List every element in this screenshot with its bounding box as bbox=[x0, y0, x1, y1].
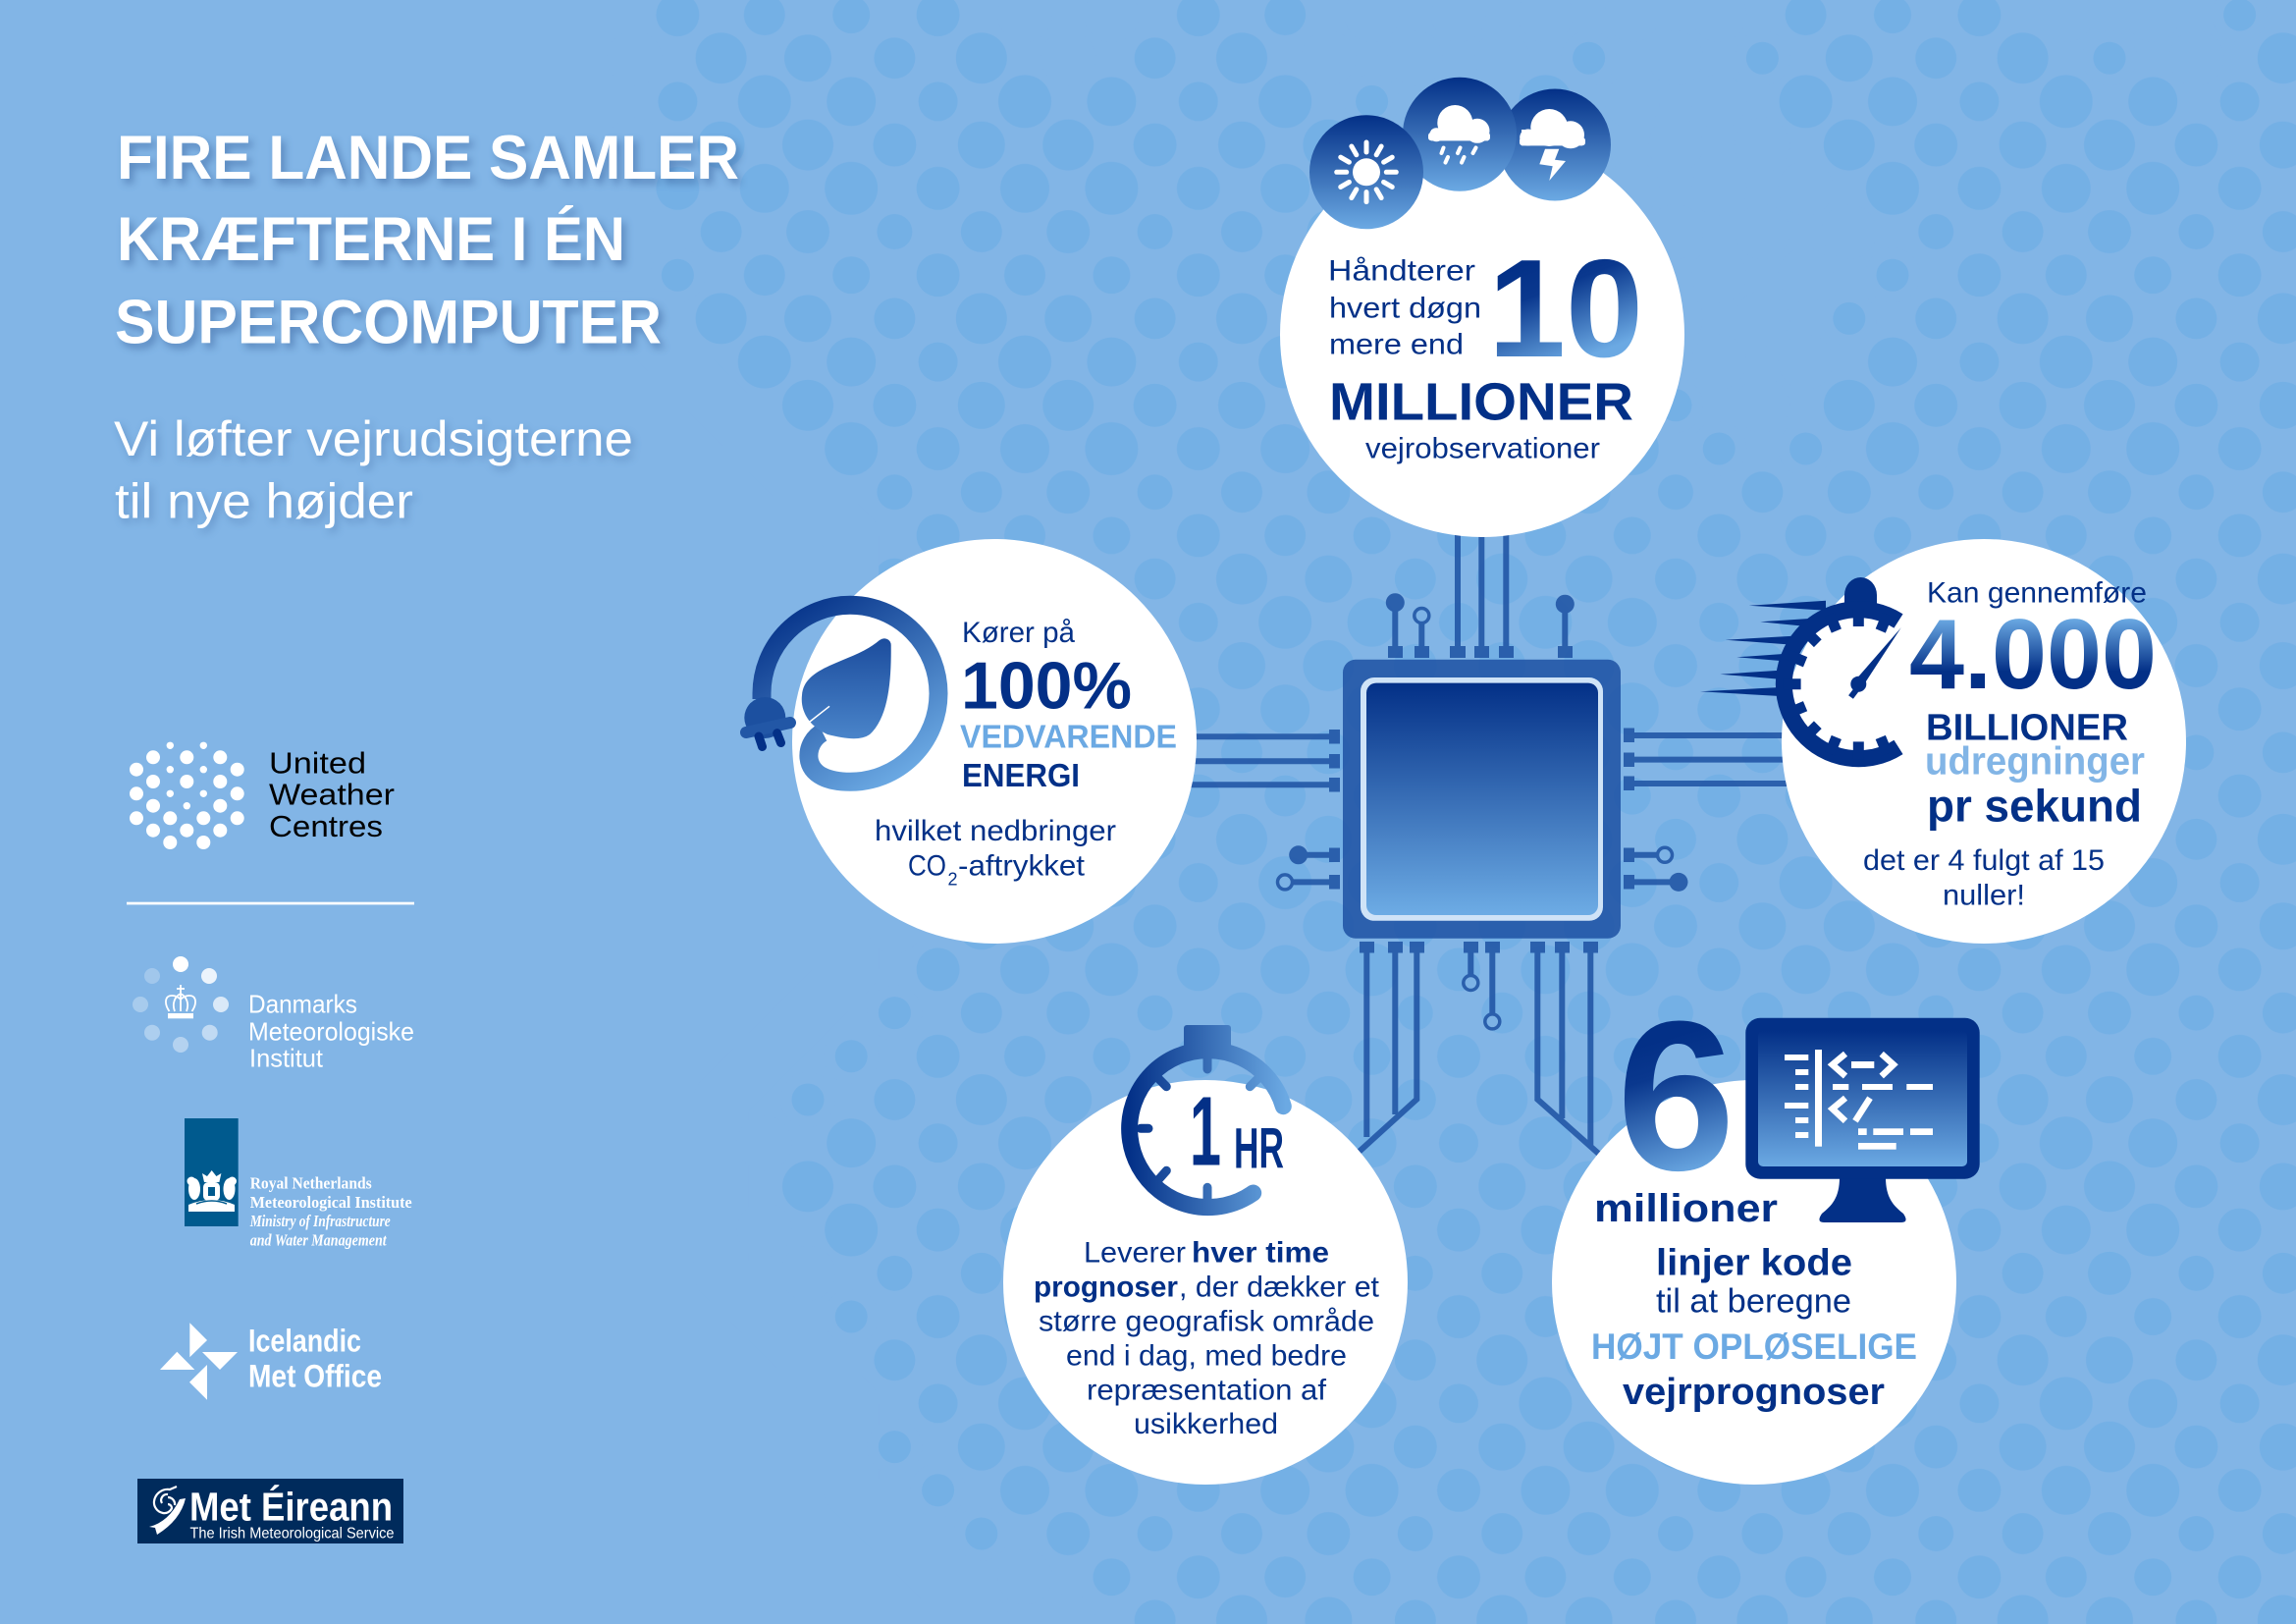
text: description: prognoser bbox=[1034, 1272, 1178, 1304]
text: description: repræsentation af bbox=[1087, 1375, 1327, 1407]
stat: 6: 6 bbox=[1617, 977, 1735, 1215]
logo text: Danmarks bbox=[248, 990, 357, 1019]
text: description: hver time bbox=[1192, 1237, 1329, 1270]
panel: 10 million observations bbox=[1280, 78, 1684, 537]
text: det er 4 fulgt af 15 nuller: det er 4 fulgt af 15 bbox=[1863, 844, 2105, 877]
stat: 1 HR: 1 bbox=[1190, 1077, 1221, 1187]
text: vejrobservationer: vejrobservationer bbox=[1365, 433, 1600, 465]
text: CO2-aftrykket: CO bbox=[908, 850, 946, 883]
subtitle: Vi løfter vejrudsigterne bbox=[114, 411, 633, 466]
text: hvilket nedbringer: hvilket nedbringer bbox=[875, 815, 1116, 847]
stat label: MILLIONER: MILLIONER bbox=[1329, 373, 1633, 432]
logo text: Icelandic bbox=[248, 1324, 361, 1359]
logo text: Met Éireann bbox=[189, 1484, 393, 1529]
stat label: BILLIONER: BILLIONER bbox=[1926, 707, 2128, 748]
title: KRÆFTERNE I ÉN bbox=[117, 205, 625, 274]
chip with circuit pins bbox=[825, 491, 1796, 1157]
logo text: Meteorologiske bbox=[248, 1016, 414, 1046]
stat: 4.000: 4.000 bbox=[1909, 600, 2157, 710]
text: til at beregne: til at beregne bbox=[1656, 1283, 1851, 1321]
icon: DMI crown with dot ring bbox=[133, 956, 229, 1053]
text: description: Leverer bbox=[1084, 1237, 1186, 1270]
title: SUPERCOMPUTER bbox=[115, 289, 662, 357]
logo: United Weather Centres bbox=[130, 742, 395, 849]
stat: 10: 10 bbox=[1488, 231, 1643, 387]
subtitle: til nye højder bbox=[115, 474, 413, 529]
logo text: Meteorological Institute bbox=[250, 1193, 412, 1212]
chip body bbox=[1343, 660, 1621, 939]
icon: plug and leaf bbox=[744, 605, 938, 782]
text: Kører på: Kører på bbox=[962, 617, 1075, 649]
logo text: Centres bbox=[269, 809, 383, 843]
text: HØJT OPLØSELIGE: HØJT OPLØSELIGE bbox=[1591, 1326, 1917, 1367]
icon: stopwatch with speed lines bbox=[1700, 577, 1901, 759]
logo text: Institut bbox=[249, 1044, 324, 1073]
background dot pattern bbox=[589, 0, 2296, 1624]
circuit pins bbox=[825, 491, 1796, 1157]
text: det er 4 fulgt af 15 nuller bbox=[1863, 844, 2105, 912]
text: description: end i dag, med bedre bbox=[1066, 1340, 1347, 1373]
logo text bbox=[249, 1174, 412, 1249]
text: intro bbox=[1328, 255, 1481, 361]
text: description: større geografisk område bbox=[1039, 1306, 1374, 1338]
panel: renewable energy bbox=[744, 539, 1197, 944]
icon: monitor with code bbox=[1745, 1018, 1980, 1222]
logo text bbox=[248, 990, 414, 1073]
text: Kan gennemføre: Kan gennemføre bbox=[1927, 576, 2147, 609]
logo text: The Irish Meteorological Service bbox=[190, 1526, 395, 1543]
chip core bbox=[1366, 683, 1598, 915]
text: linjer kode: linjer kode bbox=[1656, 1242, 1852, 1283]
chip light rim bbox=[1361, 677, 1603, 921]
text: intro: Håndterer bbox=[1328, 255, 1475, 288]
logo: Met Éireann bbox=[137, 1479, 403, 1543]
icon: KNMI crest panel bbox=[185, 1118, 239, 1226]
title bbox=[115, 124, 739, 357]
icon: rain bbox=[1403, 78, 1517, 191]
icon: thunderstorm bbox=[1499, 88, 1611, 200]
logo text: Weather bbox=[269, 777, 395, 811]
panel: calculations per second bbox=[1700, 539, 2186, 944]
logo: Royal Netherlands Meteorological Institute bbox=[185, 1118, 412, 1249]
text: VEDVARENDE: VEDVARENDE bbox=[960, 719, 1177, 755]
title: FIRE LANDE SAMLER bbox=[117, 124, 739, 192]
logo text bbox=[248, 1324, 382, 1394]
logo: Icelandic Met Office bbox=[160, 1323, 382, 1400]
logo text: and Water Management bbox=[250, 1230, 388, 1249]
logo text: Met Office bbox=[248, 1359, 382, 1394]
logo text: Royal Netherlands bbox=[250, 1174, 372, 1193]
logo text: Ministry of Infrastructure bbox=[249, 1212, 391, 1230]
subtitle bbox=[114, 411, 633, 529]
panel: hourly forecasts bbox=[1003, 1025, 1408, 1485]
text: millioner: millioner bbox=[1594, 1187, 1778, 1230]
text: description: usikkerhed bbox=[1134, 1408, 1278, 1440]
text: description bbox=[1034, 1237, 1380, 1440]
text: pr sekund: pr sekund bbox=[1927, 781, 2142, 832]
text: CO2-aftrykket bbox=[908, 850, 1086, 890]
icon: four triangles bbox=[160, 1323, 238, 1400]
text: CO2-aftrykket: -aftrykket bbox=[958, 850, 1086, 883]
text: vejrprognoser: vejrprognoser bbox=[1623, 1372, 1885, 1413]
stat: 100%: 100% bbox=[961, 649, 1132, 724]
stat: 1 HR: HR bbox=[1234, 1116, 1284, 1180]
logo text: United bbox=[269, 745, 366, 780]
text: udregninger: udregninger bbox=[1925, 739, 2145, 783]
logo: Danmarks Meteorologiske Institut bbox=[133, 956, 414, 1073]
panel: lines of code bbox=[1552, 977, 1980, 1485]
icon: UWC dot globe bbox=[130, 742, 244, 849]
text: description: , der dækker et bbox=[1179, 1272, 1380, 1304]
icon: swirl bbox=[149, 1487, 186, 1535]
text: intro: mere end bbox=[1329, 329, 1464, 361]
icon: one hour clock bbox=[1130, 1025, 1283, 1208]
text: CO2-aftrykket: 2 bbox=[948, 870, 958, 890]
icon: sun bbox=[1309, 115, 1423, 229]
logo text bbox=[269, 745, 395, 843]
text: intro: hvert døgn bbox=[1329, 292, 1481, 324]
text: ENERGI: ENERGI bbox=[962, 757, 1080, 793]
stat: 1 HR bbox=[1190, 1077, 1284, 1187]
text: det er 4 fulgt af 15 nuller: nuller! bbox=[1943, 880, 2025, 912]
